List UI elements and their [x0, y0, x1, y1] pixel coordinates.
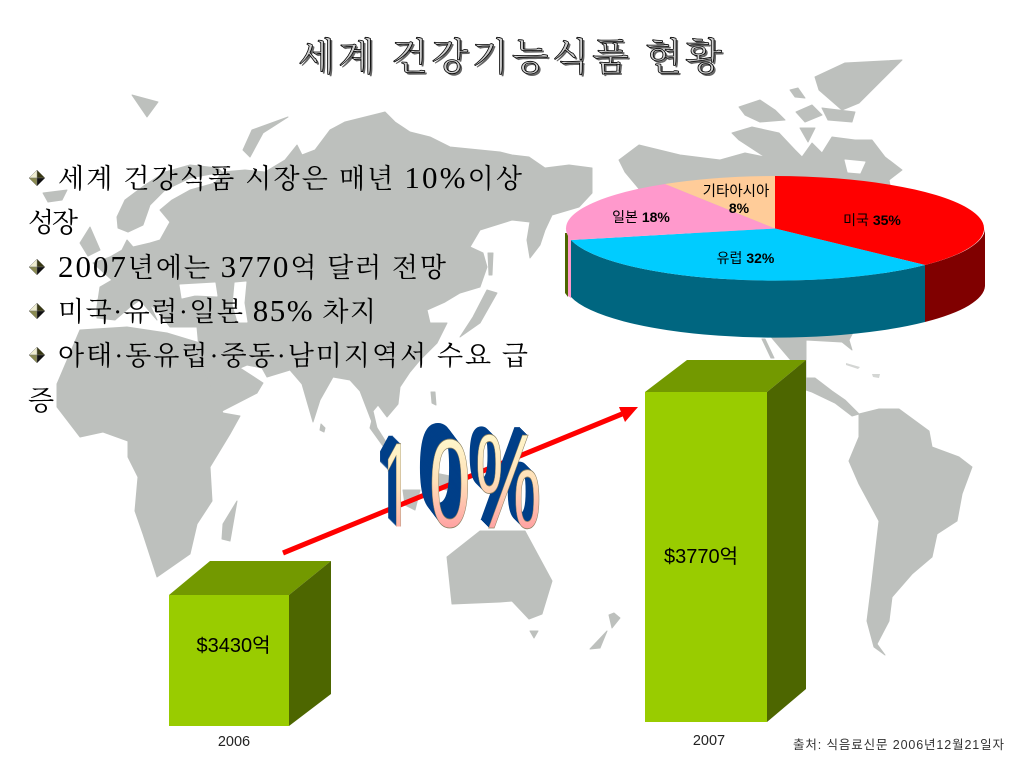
bar: 2007: $3770억	[664, 545, 738, 568]
wordart: 10%: 1	[379, 410, 408, 566]
wordart: 10%: 0	[417, 398, 459, 538]
continuation line: 증	[28, 386, 54, 416]
wordart: 10%: 0	[428, 413, 470, 552]
wordart: 10%: 1	[377, 408, 406, 564]
wordart: 10%: %	[469, 401, 536, 552]
bullet 1: 세계 건강식품 시장은 매년 10%이상	[58, 160, 522, 195]
Tasmania	[530, 631, 538, 638]
wordart: 10%: 1	[378, 409, 407, 565]
Greenland	[815, 60, 902, 110]
pie labels: 8%	[729, 200, 750, 216]
wordart: 10%	[380, 423, 540, 530]
source note: 출처: 식음료신문 2006년12월21일자	[793, 738, 1004, 752]
wordart: 10%: 0	[424, 408, 466, 547]
pie labels	[612, 183, 901, 266]
Madagascar	[222, 501, 237, 541]
Sri Lanka	[320, 424, 325, 432]
South America	[849, 409, 972, 655]
label: 2006: 2006	[218, 734, 250, 750]
slice: other Asia	[665, 176, 775, 228]
wordart: 10%: %	[470, 402, 537, 553]
Baja California	[762, 339, 774, 358]
wordart: 10%: %	[467, 399, 534, 550]
pie side walls	[565, 233, 568, 297]
bar: 2006	[169, 561, 331, 726]
bar: 2007	[645, 360, 806, 722]
wordart: 10%: %	[475, 407, 542, 558]
wordart: 10%: 0	[426, 410, 468, 550]
wordart: 10%: %	[473, 405, 540, 556]
pie labels: 유럽 32%	[717, 250, 775, 266]
pie labels: 기타아시아	[703, 183, 769, 200]
pie chart	[565, 176, 985, 338]
bullet 3: 미국·유럽·일본 85% 차지	[58, 293, 376, 328]
Svalbard	[132, 95, 158, 117]
wordart: 10%: 0	[420, 402, 462, 542]
bar: 2006: $3430억	[196, 634, 271, 657]
arrow: growth	[283, 407, 638, 553]
wordart: 10%: 1	[381, 412, 410, 568]
pie labels: 미국 35%	[843, 212, 901, 228]
Japan	[460, 290, 497, 337]
bullet 4: 아태·동유럽·중동·남미지역서 수요 급	[58, 341, 528, 371]
wordart: 10%: 0	[422, 405, 464, 544]
wordart: 10%: 0	[425, 409, 467, 548]
bullet text block	[28, 160, 528, 416]
New Zealand	[590, 613, 620, 649]
continuation line: 성장	[28, 208, 78, 238]
Hudson Bay	[845, 160, 865, 173]
Eurasia	[93, 112, 592, 441]
wordart: 10%: 0	[418, 400, 460, 539]
world map background	[43, 60, 972, 655]
North America	[619, 127, 902, 378]
British Isles	[80, 227, 100, 256]
wordart: 10%: %	[468, 400, 535, 551]
wordart: 10%: 1	[376, 407, 405, 563]
title: 세계 건강기능식품 현황	[300, 39, 724, 81]
Sumatra and Indonesia	[370, 420, 450, 510]
slice: Japan	[566, 184, 775, 240]
Caspian Sea	[233, 282, 247, 322]
label: 2007: 2007	[693, 733, 725, 749]
Novaya Zemlya	[243, 117, 288, 157]
wordart: 10%: %	[472, 404, 539, 555]
wordart: 10%: 1	[383, 414, 412, 570]
wordart: 10%: 1	[382, 413, 411, 569]
wordart: 10%: %	[471, 403, 538, 554]
bullet 2: 2007년에는 3770억 달러 전망	[58, 249, 446, 284]
slice: USA	[775, 176, 984, 265]
Caribbean islands	[846, 363, 880, 378]
wordart: 10%: 0	[419, 401, 461, 540]
slice: Europe	[571, 228, 925, 281]
Sakhalin	[488, 253, 493, 275]
Scandinavia	[117, 165, 222, 232]
wordart: 10%: 0	[429, 414, 471, 554]
Africa	[57, 327, 240, 577]
Black Sea	[180, 283, 217, 298]
wordart: 10%: 0	[423, 406, 465, 546]
wordart: 10%: 0	[421, 404, 463, 543]
Philippines	[431, 392, 436, 405]
pie labels: 일본 18%	[612, 209, 670, 225]
wordart: 10%: %	[474, 406, 541, 557]
wordart: 10%: 1	[375, 406, 404, 562]
Iceland	[43, 190, 67, 202]
wordart: 10%: 1	[380, 411, 409, 567]
Australia	[447, 531, 552, 619]
Arctic islands	[739, 88, 855, 142]
wordart: 10%: 0	[427, 412, 469, 551]
title: 세계 건강기능식품 현황	[298, 37, 722, 79]
Central America	[806, 378, 859, 416]
